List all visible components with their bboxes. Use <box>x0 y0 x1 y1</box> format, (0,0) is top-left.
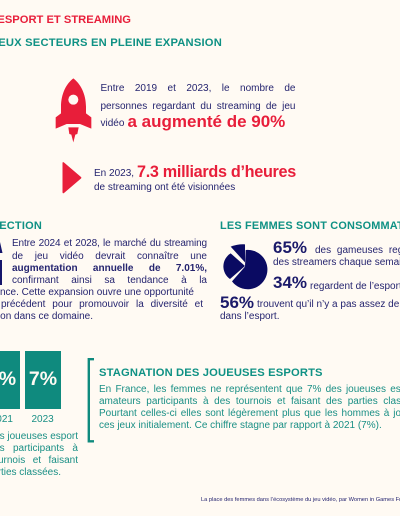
text: projection paragraph: Entre 2024 et 2028, le marché du streaming <box>12 238 207 249</box>
text: streaming growth: Entre 2019 et 2023, le nombre de <box>100 83 296 94</box>
text: women stats: regardent de l’esport <box>310 281 400 292</box>
bar: 2021 <box>0 351 20 409</box>
text: projection paragraph <box>0 238 207 322</box>
icon: chart glyph <box>0 242 2 285</box>
text: projection paragraph: confirmant ainsi sa tendance à la <box>12 275 207 286</box>
text: streaming growth: personnes regardant du streaming de jeu <box>100 101 296 112</box>
bracket <box>88 358 94 442</box>
text: projection paragraph: augmentation annuelle de 7.01%, <box>12 263 207 274</box>
icon: rocket <box>56 78 92 142</box>
chart: pie <box>223 244 268 290</box>
text: hours watched <box>94 163 296 193</box>
text: women stats: dans l’esport. <box>220 311 279 322</box>
bar: 2023 <box>25 351 61 409</box>
text: streaming growth: a augmenté de 90% <box>128 112 285 131</box>
text: hours watched: En 2023, <box>94 168 134 179</box>
text: stagnation paragraph <box>99 384 400 431</box>
text: women stats: 65% <box>273 238 307 257</box>
text: projection paragraph: de jeu vidéo devrait connaître une <box>12 251 207 262</box>
bar: 2023: 7% <box>29 368 57 390</box>
text: women stats <box>220 238 400 322</box>
heading: stagnation: STAGNATION DES JOUEUSES ESPORTS <box>99 367 323 379</box>
icon: play triangle <box>62 162 82 194</box>
label: 2023: 2023 <box>32 414 54 425</box>
text: women stats: 56% <box>220 292 254 312</box>
text: hours watched: de streaming ont été visionnées <box>94 182 235 193</box>
text: stagnation paragraph: ces jeux initialement. Ce chiffre stagne par rapport à 2021 (7%). <box>99 420 382 431</box>
text: women stats: 34% <box>273 273 307 292</box>
text: bar caption <box>0 431 78 478</box>
text: hours watched: 7.3 milliards d’heures <box>137 163 296 181</box>
text: streaming growth: vidéo <box>100 118 124 129</box>
text: streaming growth <box>100 83 296 131</box>
